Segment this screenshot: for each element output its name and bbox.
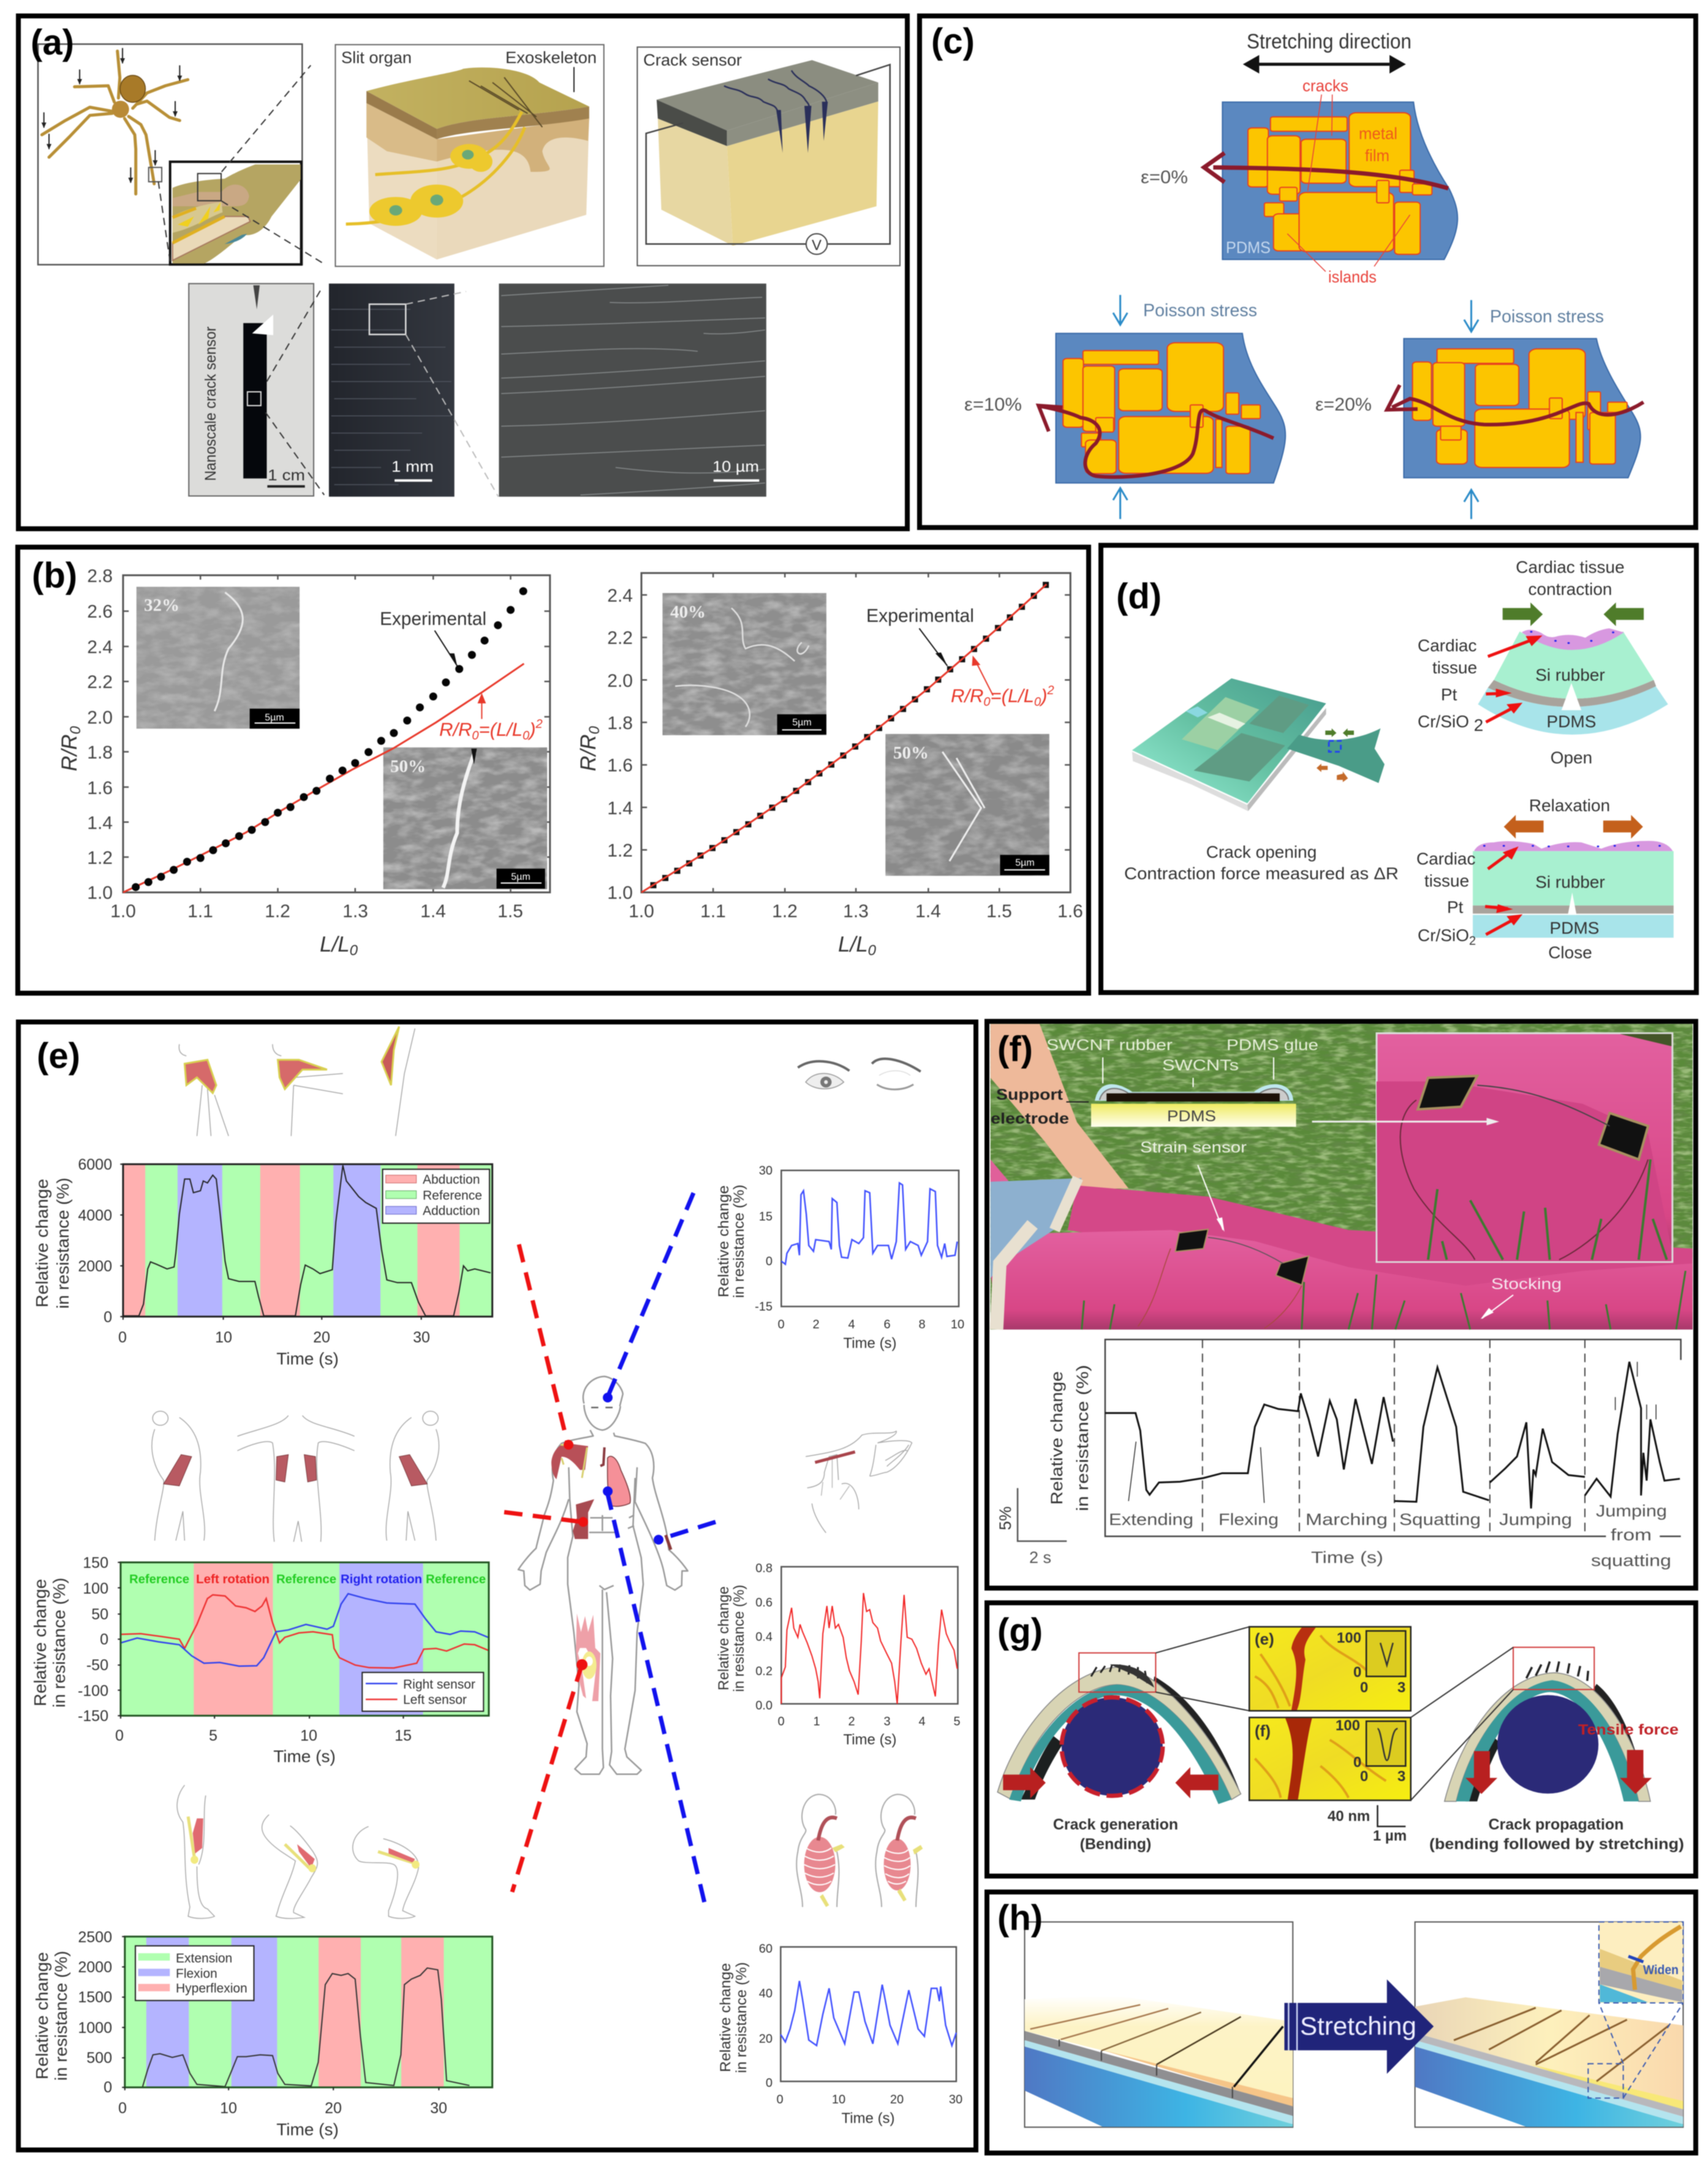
- formula left: ): [527, 719, 535, 740]
- chart: eye blinking: 6: [883, 1318, 891, 1331]
- chart: wrist pulse: 1: [813, 1715, 820, 1728]
- optical micrograph: [329, 284, 455, 497]
- formula right: 0: [983, 695, 991, 709]
- stretching arrow: Stretching: [1300, 2011, 1416, 2040]
- chart: wrist pulse: Time (s): [843, 1731, 897, 1748]
- layers text open: PDMS: [1547, 712, 1596, 731]
- voltmeter label: V: [812, 237, 822, 254]
- chart: breathing: Time (s): [841, 2110, 895, 2127]
- chart: knee flexion: 500: [86, 2049, 112, 2067]
- chart: shoulder abduction: in resistance (%): [53, 1178, 72, 1309]
- formula right: 2: [1046, 684, 1054, 697]
- human body with sensor positions: [504, 1193, 716, 1908]
- panel label g: (g): [997, 1611, 1043, 1651]
- chart: wrist pulse: [716, 1562, 961, 1748]
- label slit organ: Slit organ: [341, 48, 412, 67]
- chart: wrist pulse: 5: [953, 1715, 961, 1728]
- chart: shoulder abduction: 2000: [78, 1258, 112, 1275]
- layers text open: Cr/SiO: [1418, 712, 1469, 731]
- layers text closed: Si rubber: [1535, 872, 1605, 891]
- chart: motion signals: Squatting: [1399, 1510, 1481, 1529]
- chart: breathing: 0: [766, 2076, 773, 2090]
- labels over photo: PDMS: [1167, 1108, 1216, 1125]
- scale label 1 mm: 1 mm: [391, 458, 434, 475]
- scale labels left: 5µm: [511, 872, 531, 882]
- chart: breathing: in resistance (%): [733, 1962, 750, 2073]
- chart: trunk rotation: 15: [395, 1727, 412, 1744]
- formula left: 0: [472, 729, 479, 743]
- chart: trunk rotation: 5: [209, 1727, 217, 1744]
- layers text open: Open: [1551, 748, 1592, 767]
- chart: motion signals: Relative change: [1048, 1371, 1066, 1505]
- chart: motion signals: in resistance (%): [1073, 1364, 1092, 1512]
- chart: shoulder abduction: Time (s): [276, 1349, 339, 1368]
- chart: trunk rotation: -100: [78, 1682, 108, 1700]
- chart: eye blinking: 8: [918, 1318, 926, 1331]
- caption crack generation: Crack generation: [1053, 1816, 1178, 1833]
- label widen: Widen: [1643, 1963, 1679, 1977]
- crack sensor block illustration: [637, 47, 900, 266]
- inset labels left: 32%: [144, 596, 179, 615]
- chart: knee flexion: [32, 1929, 493, 2139]
- chart left: R/R0 at 32 and 50 percent: 1.4: [87, 813, 113, 833]
- formula left: 2: [535, 717, 543, 731]
- chart: wrist pulse: 0.4: [755, 1630, 773, 1644]
- label experimental left: Experimental: [380, 608, 486, 629]
- inset labels right: 40%: [670, 602, 706, 622]
- photo of nanoscale crack sensor: [189, 284, 314, 496]
- AFM scale labels: 40 nm: [1328, 1808, 1370, 1825]
- AFM crack images: (f): [1255, 1722, 1271, 1740]
- chart: motion signals: Time (s): [1311, 1548, 1383, 1567]
- stretching arrow: [1285, 1980, 1434, 2074]
- magnified sensor inset: [1312, 1033, 1672, 1262]
- panel f: stocking strain sensor: [987, 1021, 1696, 1588]
- heading relaxation: Relaxation: [1529, 796, 1610, 815]
- chart left: R/R0 at 32 and 50 percent: 2.8: [87, 566, 113, 586]
- chart: shoulder abduction: 0: [118, 1329, 127, 1346]
- chart: shoulder abduction: 30: [413, 1329, 430, 1346]
- y axis title right: R/R: [576, 735, 600, 771]
- photo of sensor on stocking: [991, 1024, 1693, 1330]
- layers text closed: tissue: [1424, 871, 1469, 890]
- AFM crack images: 0: [1360, 1768, 1368, 1785]
- bending illustration left: [997, 1627, 1249, 1804]
- crack film before stretching: [1025, 1922, 1293, 2127]
- chart left: R/R0 at 32 and 50 percent: 1.1: [187, 901, 213, 921]
- panel label e: (e): [37, 1036, 80, 1076]
- chart left: R/R0 at 32 and 50 percent: 1.6: [87, 778, 113, 798]
- chart: trunk rotation: Left rotation: [196, 1573, 270, 1586]
- chart right: R/R0 at 40 and 50 percent: 1.0: [607, 883, 633, 903]
- chart: trunk rotation: Right rotation: [341, 1573, 422, 1586]
- labels over photo: Support: [996, 1086, 1064, 1103]
- chart: eye blinking: -15: [755, 1300, 773, 1314]
- breathing illustration: [796, 1795, 923, 1907]
- stretched crack film with inset: [1415, 1922, 1683, 2127]
- labels over photo: SWCNTs: [1162, 1057, 1239, 1074]
- layers text closed: 2: [1469, 934, 1476, 948]
- chart: wrist pulse: 0.8: [755, 1562, 773, 1575]
- chart: knee flexion: Hyperflexion: [176, 1981, 248, 1996]
- chart: trunk rotation: Right sensor: [403, 1678, 475, 1692]
- layers text closed: PDMS: [1550, 918, 1599, 937]
- chart: wrist pulse: 0.6: [755, 1596, 773, 1610]
- panel c: crack islands and conduction path: [920, 16, 1696, 528]
- chart: breathing: 10: [832, 2093, 845, 2106]
- chart: trunk rotation: -150: [78, 1708, 108, 1725]
- formula right: R/R: [951, 685, 983, 706]
- label Poisson stress: Poisson stress: [1143, 301, 1257, 320]
- panel h: crack widening under stretching: [987, 1892, 1696, 2153]
- chart: shoulder abduction: Abduction: [423, 1173, 480, 1187]
- chart right: R/R0 at 40 and 50 percent: 1.3: [843, 901, 869, 921]
- chart right: R/R0 at 40 and 50 percent: 1.8: [607, 713, 633, 733]
- y axis title right: 0: [586, 726, 603, 735]
- scale labels left: 5µm: [265, 713, 284, 723]
- inset labels left: [144, 596, 426, 776]
- 3D device illustration: [1132, 678, 1385, 811]
- chart right: R/R0 at 40 and 50 percent: 1.1: [700, 901, 726, 921]
- layers text open: Cardiac: [1418, 636, 1476, 655]
- formula left: 0: [523, 729, 529, 743]
- slit organ block illustration: [335, 45, 604, 267]
- open state cross-section: [1418, 558, 1668, 767]
- layers text closed: Close: [1548, 943, 1592, 962]
- x axis title right: L/L: [838, 933, 868, 956]
- label PDMS: PDMS: [1226, 238, 1271, 257]
- panel label d: (d): [1116, 577, 1162, 616]
- chart: breathing: 40: [759, 1987, 773, 2000]
- chart: shoulder abduction: Adduction: [423, 1204, 480, 1218]
- x axis title right: 0: [868, 942, 877, 959]
- chart: motion signals: [996, 1339, 1681, 1570]
- AFM crack images: 0: [1353, 1754, 1361, 1771]
- chart left: R/R0 at 32 and 50 percent: 2.6: [87, 602, 113, 622]
- chart: shoulder abduction: 6000: [78, 1156, 112, 1173]
- AFM crack images: 0: [1360, 1679, 1368, 1696]
- chart: breathing: 30: [949, 2093, 962, 2106]
- label metal film: metal: [1359, 124, 1397, 143]
- chart: breathing: [717, 1942, 962, 2127]
- chart left: R/R0 at 32 and 50 percent: 1.4: [420, 901, 446, 921]
- chart: knee flexion: 2500: [78, 1929, 112, 1946]
- layers text open: [1418, 636, 1605, 767]
- chart right: R/R0 at 40 and 50 percent: 2.0: [607, 671, 633, 691]
- formula right: ): [1038, 685, 1048, 706]
- chart: trunk rotation: in resistance (%): [50, 1578, 69, 1708]
- chart right: R/R0 at 40 and 50 percent: 1.4: [607, 798, 633, 819]
- chart: knee flexion: 20: [325, 2100, 342, 2117]
- strain value 20 percent: ε=20%: [1315, 395, 1372, 415]
- layers text open: 2: [1474, 716, 1483, 735]
- chart: knee flexion: Flexion: [176, 1967, 217, 1981]
- scale label 10 um: 10 µm: [712, 458, 759, 475]
- closed state cross-section: [1416, 796, 1674, 962]
- panel label b: (b): [32, 556, 77, 596]
- AFM crack images: 0: [1353, 1664, 1361, 1681]
- chart: shoulder abduction: 20: [313, 1329, 330, 1346]
- labels over photo: electrode: [991, 1110, 1069, 1127]
- AFM crack images: (e): [1255, 1630, 1274, 1648]
- chart: knee flexion: 30: [430, 2100, 447, 2117]
- chart right: R/R0 at 40 and 50 percent: 1.6: [607, 755, 633, 776]
- chart: breathing: 20: [890, 2093, 904, 2106]
- strain value 0 percent: ε=0%: [1141, 167, 1188, 187]
- chart: trunk rotation: [31, 1554, 489, 1766]
- labels over photo: [991, 1037, 1562, 1293]
- AFM crack images: 100: [1337, 1630, 1361, 1646]
- chart: wrist pulse: in resistance (%): [731, 1584, 747, 1692]
- chart: knee flexion: in resistance (%): [51, 1951, 70, 2081]
- chart right: R/R0 at 40 and 50 percent: 1.4: [915, 901, 941, 921]
- chart: trunk rotation: 10: [300, 1727, 317, 1744]
- chart: wrist pulse: 0.2: [755, 1665, 773, 1678]
- chart: knee flexion: 1500: [78, 1989, 112, 2006]
- chart: wrist pulse: 3: [883, 1715, 891, 1728]
- label film: film: [1365, 146, 1389, 165]
- scale labels right: [792, 717, 1035, 868]
- chart right: R/R0 at 40 and 50 percent: 1.2: [772, 901, 798, 921]
- x axis title left: L/L: [320, 933, 350, 956]
- state at 20 percent strain: [1315, 300, 1644, 519]
- chart left: R/R0 at 32 and 50 percent: 2.2: [87, 672, 113, 692]
- panel label h: (h): [997, 1898, 1043, 1938]
- formula left: =(L/L: [479, 719, 523, 740]
- layers text closed: Cardiac: [1416, 849, 1475, 868]
- chart: shoulder abduction: 0: [104, 1309, 112, 1326]
- chart left: R/R0 at 32 and 50 percent: 2.4: [87, 637, 113, 657]
- hand illustration: [806, 1431, 912, 1533]
- chart: motion signals: Extending: [1109, 1510, 1193, 1529]
- chart: motion signals: 5%: [996, 1506, 1015, 1531]
- label crack sensor: Crack sensor: [643, 51, 742, 69]
- chart: breathing: Relative change: [717, 1963, 734, 2072]
- x axis title left: 0: [350, 942, 358, 959]
- chart left: R/R0 at 32 and 50 percent: 1.8: [87, 743, 113, 763]
- stretching direction heading: Stretching direction: [1247, 30, 1411, 53]
- heading contraction second line: contraction: [1529, 580, 1612, 599]
- label exoskeleton: Exoskeleton: [505, 48, 597, 67]
- chart: knee flexion: Time (s): [276, 2120, 339, 2139]
- chart: eye blinking: 2: [812, 1318, 820, 1331]
- chart left: R/R0 at 32 and 50 percent: 1.2: [265, 901, 290, 921]
- rotated sensor caption: Nanoscale crack sensor: [202, 327, 219, 481]
- AFM crack images: 3: [1397, 1679, 1405, 1696]
- panel b: resistance versus elongation charts: [18, 547, 1089, 993]
- chart: shoulder abduction: 4000: [78, 1207, 112, 1224]
- chart: trunk rotation: Relative change: [31, 1579, 50, 1706]
- state at 0 percent strain: [1141, 77, 1457, 286]
- panel label c: (c): [931, 21, 975, 61]
- label tensile force: Tensile force: [1578, 1722, 1679, 1738]
- chart: knee flexion: 1000: [78, 2019, 112, 2037]
- caption bending: (Bending): [1080, 1836, 1151, 1853]
- chart: wrist pulse: 0.0: [755, 1699, 773, 1712]
- layers text open: tissue: [1432, 658, 1477, 677]
- label Poisson stress right: Poisson stress: [1490, 307, 1604, 327]
- inset labels left: 50%: [390, 757, 426, 776]
- sensor cross-section diagram: [991, 1037, 1562, 1293]
- chart: wrist pulse: 2: [848, 1715, 855, 1728]
- chart: eye blinking: Relative change: [716, 1185, 732, 1298]
- chart: trunk rotation: 0: [100, 1631, 108, 1648]
- chart: knee flexion: Extension: [176, 1951, 232, 1966]
- stretching illustration right: [1411, 1648, 1652, 1801]
- scale label 1 cm: 1 cm: [268, 467, 305, 484]
- chart right: R/R0 at 40 and 50 percent: 1.5: [986, 901, 1012, 921]
- chart: trunk rotation: 100: [83, 1580, 108, 1597]
- arm muscle illustrations: [179, 1027, 415, 1136]
- chart: eye blinking: in resistance (%): [731, 1185, 747, 1298]
- chart: breathing: 60: [759, 1942, 773, 1956]
- chart: trunk rotation: Reference: [426, 1573, 486, 1586]
- chart: motion signals: from: [1611, 1526, 1652, 1544]
- chart: motion signals: squatting: [1591, 1551, 1671, 1570]
- formula right: =(L/L: [991, 685, 1034, 706]
- scale labels right: 5µm: [1015, 858, 1035, 868]
- chart: trunk rotation: 50: [91, 1606, 108, 1623]
- chart: knee flexion: 2000: [78, 1959, 112, 1976]
- chart: eye blinking: 10: [951, 1318, 964, 1331]
- formula left: R/R: [439, 719, 472, 740]
- labels over photo: Strain sensor: [1140, 1139, 1247, 1156]
- AFM crack images: 100: [1336, 1717, 1360, 1734]
- layers text open: Si rubber: [1535, 665, 1605, 684]
- SEM micrograph with cracks: [499, 284, 766, 497]
- formula right: 0: [1034, 695, 1041, 709]
- panel g: crack generation and propagation: [987, 1603, 1696, 1876]
- label islands: islands: [1328, 268, 1377, 286]
- heading contraction: Cardiac tissue: [1516, 558, 1625, 577]
- layers text closed: Cr/SiO: [1418, 926, 1469, 945]
- panel e: body-attached sensors and signals: [18, 1022, 976, 2150]
- AFM crack images: 3: [1397, 1768, 1405, 1785]
- AFM scale label micrometre: 1 µm: [1373, 1828, 1407, 1844]
- chart: trunk rotation: -50: [86, 1657, 108, 1674]
- chart left: R/R0 at 32 and 50 percent: 2.0: [87, 708, 113, 728]
- chart: trunk rotation: Left sensor: [403, 1693, 467, 1707]
- chart: eye blinking: 4: [848, 1318, 855, 1331]
- chart: breathing: 20: [759, 2032, 773, 2046]
- layers text closed: [1416, 849, 1605, 962]
- y axis title left: 0: [67, 726, 84, 735]
- chart right: R/R0 at 40 and 50 percent: [576, 573, 1083, 959]
- panel label f: (f): [997, 1029, 1033, 1069]
- inset labels right: [670, 602, 929, 763]
- knee muscle illustrations: [177, 1785, 420, 1918]
- label experimental right: Experimental: [866, 605, 974, 626]
- chart: motion signals: Jumping: [1596, 1502, 1667, 1520]
- chart: motion signals: Flexing: [1219, 1510, 1279, 1529]
- spider illustration with magnified leg: [38, 44, 302, 265]
- chart right: R/R0 at 40 and 50 percent: 2.2: [607, 628, 633, 648]
- chart: shoulder abduction: Relative change: [32, 1179, 51, 1307]
- chart right: R/R0 at 40 and 50 percent: 2.4: [607, 586, 633, 606]
- chart: motion signals: Marching: [1306, 1510, 1388, 1529]
- chart: eye blinking: Time (s): [843, 1335, 897, 1352]
- chart right: R/R0 at 40 and 50 percent: 1.6: [1057, 901, 1083, 921]
- chart: shoulder abduction: [32, 1156, 493, 1368]
- eye illustration: [798, 1059, 921, 1089]
- chart left: R/R0 at 32 and 50 percent: 1.2: [87, 848, 113, 868]
- chart: eye blinking: 0: [766, 1255, 773, 1268]
- chart left: R/R0 at 32 and 50 percent: 1.3: [342, 901, 368, 921]
- chart: eye blinking: [716, 1164, 964, 1352]
- state at 10 percent strain: [964, 295, 1285, 519]
- chart: knee flexion: Relative change: [32, 1952, 51, 2079]
- AFM crack images: [1249, 1627, 1411, 1844]
- chart left: R/R0 at 32 and 50 percent: 1.0: [110, 901, 136, 921]
- chart: trunk rotation: Reference: [276, 1573, 336, 1586]
- chart: knee flexion: 0: [104, 2079, 112, 2096]
- panel label a: (a): [31, 23, 74, 62]
- chart left: R/R0 at 32 and 50 percent: [58, 566, 550, 959]
- strain value 10 percent: ε=10%: [964, 395, 1022, 415]
- caption crack propagation: Crack propagation: [1489, 1816, 1623, 1833]
- chart: trunk rotation: 0: [115, 1727, 124, 1744]
- chart: trunk rotation: Time (s): [273, 1747, 336, 1766]
- chart left: R/R0 at 32 and 50 percent: 1.0: [87, 883, 113, 903]
- labels over photo: PDMS glue: [1226, 1037, 1318, 1054]
- chart: eye blinking: 0: [777, 1318, 785, 1331]
- layers text closed: Pt: [1447, 898, 1464, 917]
- caption bending followed by stretching: (bending followed by stretching): [1429, 1836, 1684, 1853]
- y axis title left: R/R: [58, 735, 81, 771]
- caption contraction force: Contraction force measured as ΔR: [1124, 864, 1399, 883]
- chart: knee flexion: 10: [220, 2100, 237, 2117]
- inset labels right: 50%: [893, 743, 929, 763]
- panel d: cardiac tissue crack sensor: [1101, 545, 1696, 993]
- chart: knee flexion: 0: [118, 2100, 127, 2117]
- chart right: R/R0 at 40 and 50 percent: 1.0: [629, 901, 654, 921]
- chart: motion signals: 2 s: [1029, 1548, 1051, 1567]
- chart: wrist pulse: 0: [777, 1715, 785, 1728]
- double arrow: [1243, 55, 1406, 74]
- chart: wrist pulse: 4: [918, 1715, 926, 1728]
- chart: eye blinking: 15: [759, 1210, 773, 1224]
- chart: motion signals: Jumping: [1499, 1510, 1572, 1529]
- torso muscle illustrations: [152, 1411, 439, 1542]
- label cracks: cracks: [1302, 77, 1348, 95]
- chart: eye blinking: 30: [759, 1164, 773, 1178]
- scale labels right: 5µm: [792, 717, 812, 728]
- chart: breathing: 0: [776, 2093, 784, 2106]
- chart: shoulder abduction: 10: [215, 1329, 232, 1346]
- caption crack opening: Crack opening: [1206, 842, 1317, 861]
- chart right: R/R0 at 40 and 50 percent: 1.2: [607, 841, 633, 861]
- layers text open: Pt: [1441, 685, 1457, 704]
- labels over photo: SWCNT rubber: [1046, 1037, 1173, 1054]
- labels over photo: Stocking: [1491, 1276, 1562, 1293]
- chart: shoulder abduction: Reference: [423, 1189, 482, 1203]
- scale labels left: [265, 713, 531, 882]
- chart left: R/R0 at 32 and 50 percent: 1.5: [497, 901, 523, 921]
- chart: trunk rotation: Reference: [129, 1573, 189, 1586]
- chart: trunk rotation: 150: [83, 1554, 108, 1572]
- chart: wrist pulse: Relative change: [716, 1586, 732, 1690]
- panel a: spider slit organ and crack sensor: [18, 16, 907, 529]
